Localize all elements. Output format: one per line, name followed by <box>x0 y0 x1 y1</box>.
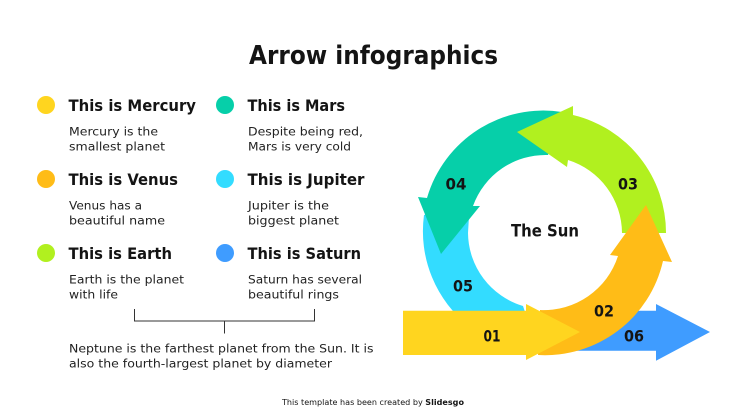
heading: Jupiter: This is Jupiter <box>248 170 365 189</box>
heading: Venus: This is Venus <box>68 170 178 189</box>
text: Jupiter description <box>247 198 339 228</box>
label 03: 03 <box>618 174 638 193</box>
heading: Earth: This is Earth <box>68 244 172 263</box>
label 06: 06 <box>624 327 644 346</box>
text: Mercury description <box>69 124 165 154</box>
text: Neptune note: Neptune is the farthest planet from the Sun. It is <box>69 342 374 356</box>
item: Saturn <box>216 244 362 302</box>
text: Neptune note: also the fourth-largest planet by diameter <box>69 356 332 370</box>
text: Saturn description <box>248 272 362 302</box>
arrow 01: yellow <box>403 304 580 360</box>
text: Mercury description: Mercury is the <box>69 124 158 138</box>
bracket <box>134 309 314 334</box>
center label: The Sun <box>511 222 579 241</box>
text: Saturn description: beautiful rings <box>248 288 339 302</box>
arrow 06: blue <box>560 304 710 361</box>
title: Arrow infographics <box>249 41 498 71</box>
item: Earth <box>37 244 184 302</box>
icon: blue dot <box>216 244 234 262</box>
text: Earth description: Earth is the planet <box>69 272 184 286</box>
text: Venus description: Venus has a <box>69 198 142 212</box>
label 02: 02 <box>594 302 614 321</box>
text: Neptune note <box>69 342 374 370</box>
text: Venus description: beautiful name <box>69 214 165 228</box>
footer credit: This template has been created by Slidesgo <box>281 398 464 407</box>
heading: Mars: This is Mars <box>248 96 345 115</box>
label 04: 04 <box>446 174 466 193</box>
item: Venus <box>37 170 178 228</box>
text: Jupiter description: biggest planet <box>248 214 339 228</box>
heading: Saturn: This is Saturn <box>248 244 361 263</box>
item: Mercury <box>37 96 197 154</box>
text: Mercury description: smallest planet <box>69 140 165 154</box>
item: Mars <box>216 96 363 154</box>
text: Earth description: with life <box>69 288 118 302</box>
text: Jupiter description: Jupiter is the <box>247 198 329 212</box>
text: Earth description <box>69 272 184 302</box>
icon: cyan dot <box>216 170 234 188</box>
arrow 02: orange <box>538 205 672 355</box>
arrow 03: lime <box>517 106 666 233</box>
arrow 04: teal <box>418 111 562 254</box>
icon: lime dot <box>37 244 55 262</box>
circular arrow diagram <box>403 106 710 361</box>
text: Mars description: Mars is very cold <box>248 140 351 154</box>
text: Venus description <box>69 198 165 228</box>
icon: orange dot <box>37 170 55 188</box>
text: Mars description <box>248 124 363 154</box>
label 05: 05 <box>453 276 473 296</box>
icon: yellow dot <box>37 96 55 114</box>
text: Mars description: Despite being red, <box>248 124 363 138</box>
item: Jupiter <box>216 170 365 228</box>
arrow 05: cyan <box>423 200 530 327</box>
label 01: 01 <box>484 327 500 346</box>
heading: Mercury: This is Mercury <box>68 96 197 115</box>
icon: teal dot <box>216 96 234 114</box>
text: Saturn description: Saturn has several <box>248 272 362 286</box>
